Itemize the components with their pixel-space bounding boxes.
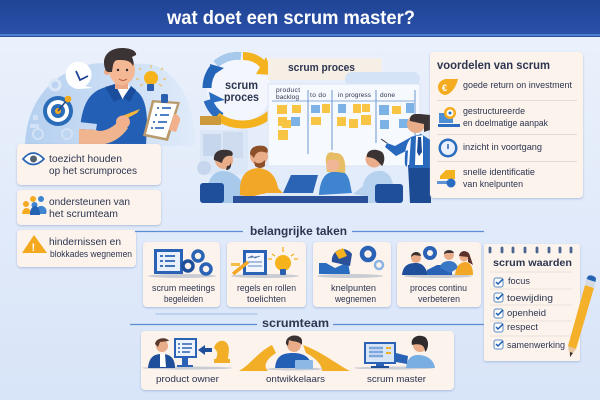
heading: scrum waarden (493, 257, 572, 269)
text: blokkades wegnemen (50, 249, 132, 259)
icon: obstacle and gears (317, 248, 383, 278)
icon: board and gears (148, 249, 216, 278)
scrum proces label: scrum proces (288, 62, 355, 74)
heading: scrumteam: scrumteam (262, 318, 329, 330)
text: begeleiden (164, 294, 203, 304)
text: aanpak: gestructureerde (463, 106, 525, 116)
laptop (265, 175, 318, 196)
text: knelpunten (463, 167, 535, 189)
scrum board: backlog (276, 94, 299, 101)
scrum board: done (380, 92, 395, 99)
text (152, 283, 215, 304)
icon: eye (23, 153, 44, 164)
scrum board: product (276, 87, 300, 94)
icon: pencil (568, 275, 596, 357)
icon: clock (438, 138, 458, 158)
clipboard (143, 94, 180, 141)
text: het scrumteam (49, 209, 118, 220)
value list: toewijding (507, 293, 553, 304)
header banner (0, 0, 600, 37)
icon: clock bubble (66, 62, 93, 89)
person (79, 48, 147, 145)
illustration: scrum master with checklist (25, 48, 195, 146)
text: aanpak (463, 106, 548, 128)
text: toezicht houden (49, 154, 122, 165)
text: scrum meetings (152, 283, 215, 293)
heading: voordelen van scrum (437, 60, 550, 72)
presenter (381, 114, 438, 203)
icon: team improving (402, 248, 473, 278)
card: toezicht (17, 144, 161, 185)
text: aanpak: en doelmatige aanpak (463, 118, 548, 128)
team member 3 (319, 152, 352, 195)
role: product owner (142, 338, 232, 370)
heading: belangrijke taken: belangrijke taken (250, 224, 347, 238)
illustration: team meeting (197, 130, 403, 203)
role label: scrum master (367, 374, 426, 385)
text: op het scrumproces (49, 166, 137, 177)
role label: product owner (156, 374, 219, 385)
value list: focus (508, 276, 530, 287)
loop label: scrum (225, 78, 258, 92)
icon: document and bulb (231, 247, 299, 278)
task card: regels en rollen (227, 242, 306, 307)
text: ondersteunen van (49, 197, 130, 208)
text: knelpunten: snelle identificatie (463, 167, 535, 177)
decorative shade above scrumteam (155, 313, 258, 315)
icon: key and blocks (437, 170, 456, 188)
text: return: goede return on investment (463, 80, 572, 90)
card: hindernissen (17, 230, 136, 267)
icon: euro coin: € (442, 83, 447, 93)
icon: team (22, 196, 47, 215)
task card: scrum meetings (143, 242, 220, 307)
text: hindernissen en (49, 237, 121, 248)
text: regels en rollen (237, 283, 296, 293)
text: knelpunten (331, 283, 376, 293)
text: wegnemen (334, 294, 376, 304)
card: ondersteunen (17, 190, 161, 225)
panel: scrumteam (141, 331, 454, 390)
role label: ontwikkelaars (266, 374, 325, 385)
sticky notes (277, 104, 401, 140)
text (49, 237, 132, 259)
panel: scrum waarden notebook (484, 244, 596, 361)
icon: target and hand (438, 107, 460, 127)
role: ontwikkelaars (239, 335, 350, 371)
table (233, 196, 368, 203)
scrum board: to do (310, 92, 326, 99)
task card: proces verbeteren (397, 242, 481, 307)
text: knelpunten: van knelpunten (463, 179, 523, 189)
title: wat doet een scrum master? (166, 7, 415, 29)
text (49, 154, 137, 177)
text: toelichten (247, 294, 286, 304)
icon: euro coin (438, 79, 458, 95)
panel: voordelen van scrum (430, 52, 583, 198)
text (49, 197, 130, 220)
loop label (224, 78, 259, 104)
icon: warning: ! (32, 242, 35, 254)
value list: samenwerking (507, 340, 565, 351)
scrum proces label (268, 58, 382, 80)
value list: openheid (507, 308, 546, 319)
text: voortgang: inzicht in voortgang (463, 142, 542, 152)
team member 2 (240, 146, 283, 197)
team member 1 (200, 150, 250, 203)
value list: respect (507, 322, 538, 333)
icon: light bulb (136, 65, 166, 91)
scrum board (268, 72, 420, 166)
illustration: scrum loop (200, 56, 273, 125)
role: scrum master (354, 336, 435, 370)
team member 4 (353, 150, 403, 203)
scrum board: in progress (338, 92, 372, 99)
icon: target (43, 96, 73, 126)
text (410, 283, 467, 304)
text (237, 283, 296, 304)
value list (494, 276, 565, 351)
task card: knelpunten (313, 242, 391, 307)
text (331, 283, 376, 304)
text: proces continu (410, 283, 467, 293)
text: verbeteren (418, 294, 460, 304)
loop label: proces (224, 90, 259, 104)
